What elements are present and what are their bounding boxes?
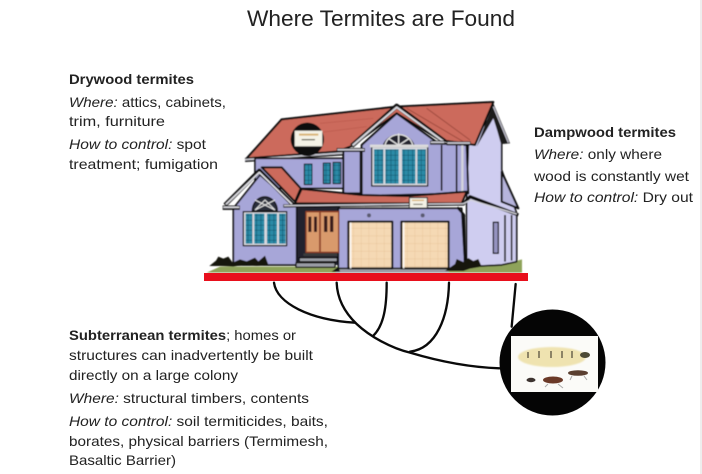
text block: drywood termites: Where: attics, cabinets,: [69, 94, 226, 110]
text block: subterranean termites: directly on a large colony: [69, 367, 238, 383]
upper small windows: [304, 164, 312, 185]
shrubs: [209, 256, 268, 267]
text block: subterranean termites: Basaltic Barrier): [69, 452, 176, 468]
left gable wall: [233, 175, 297, 265]
icon: worker termites: [526, 370, 588, 388]
garage lamps: [367, 213, 371, 217]
main roof: [247, 102, 493, 158]
red ground bar: [204, 273, 528, 281]
dormer arched window: [372, 147, 428, 186]
text block: subterranean termites: structures can inadvertently be built: [69, 347, 313, 363]
text block: subterranean termites: borates, physical barriers (Termimesh,: [69, 433, 328, 449]
text block: dampwood termites: How to control: Dry out: [534, 189, 693, 205]
porch roof: [295, 189, 467, 203]
left gable roof: [262, 167, 301, 202]
text block: drywood termites: trim, furniture: [69, 113, 165, 129]
text block: subterranean termites: [69, 327, 328, 468]
text block: dampwood termites: Where: only where: [534, 146, 662, 162]
dormer: [362, 113, 468, 196]
text block: drywood termites: How to control: spot: [69, 136, 206, 152]
icon: queen termite: [518, 347, 590, 367]
text block: dampwood termites: [533, 124, 693, 205]
text block: subterranean termites: Subterranean termites ; homes or: [69, 327, 296, 343]
background strip: [700, 0, 702, 474]
left arched window: [243, 212, 287, 246]
sign: porch: [409, 198, 427, 208]
driveway: [335, 269, 450, 273]
text block: drywood termites: treatment; fumigation: [69, 156, 218, 172]
upper wall: [255, 158, 347, 188]
lawn: [207, 259, 522, 273]
eave: [245, 153, 343, 160]
lower eave: [283, 197, 518, 215]
text block: subterranean termites: How to control: soil termiticides, baits,: [69, 413, 328, 429]
downpipe: [457, 207, 465, 263]
right side wall: [467, 113, 517, 267]
text block: subterranean termites: Where: structural timbers, contents: [69, 390, 309, 406]
termite colony circle: [500, 310, 606, 416]
lower wall: [297, 205, 340, 265]
porch steps: [303, 253, 337, 256]
termite tunnels: [274, 283, 516, 368]
title: Where Termites are Found: [247, 6, 515, 31]
text block: drywood termites: [69, 71, 226, 172]
text block: drywood termites: Drywood termites: [69, 71, 194, 87]
garage doors: [348, 222, 392, 268]
text block: dampwood termites: Dampwood termites: [534, 124, 676, 140]
text block: dampwood termites: wood is constantly wet: [533, 168, 689, 184]
illustration: house: [207, 102, 522, 273]
front door: [306, 212, 339, 252]
sign: roof: [291, 123, 324, 156]
